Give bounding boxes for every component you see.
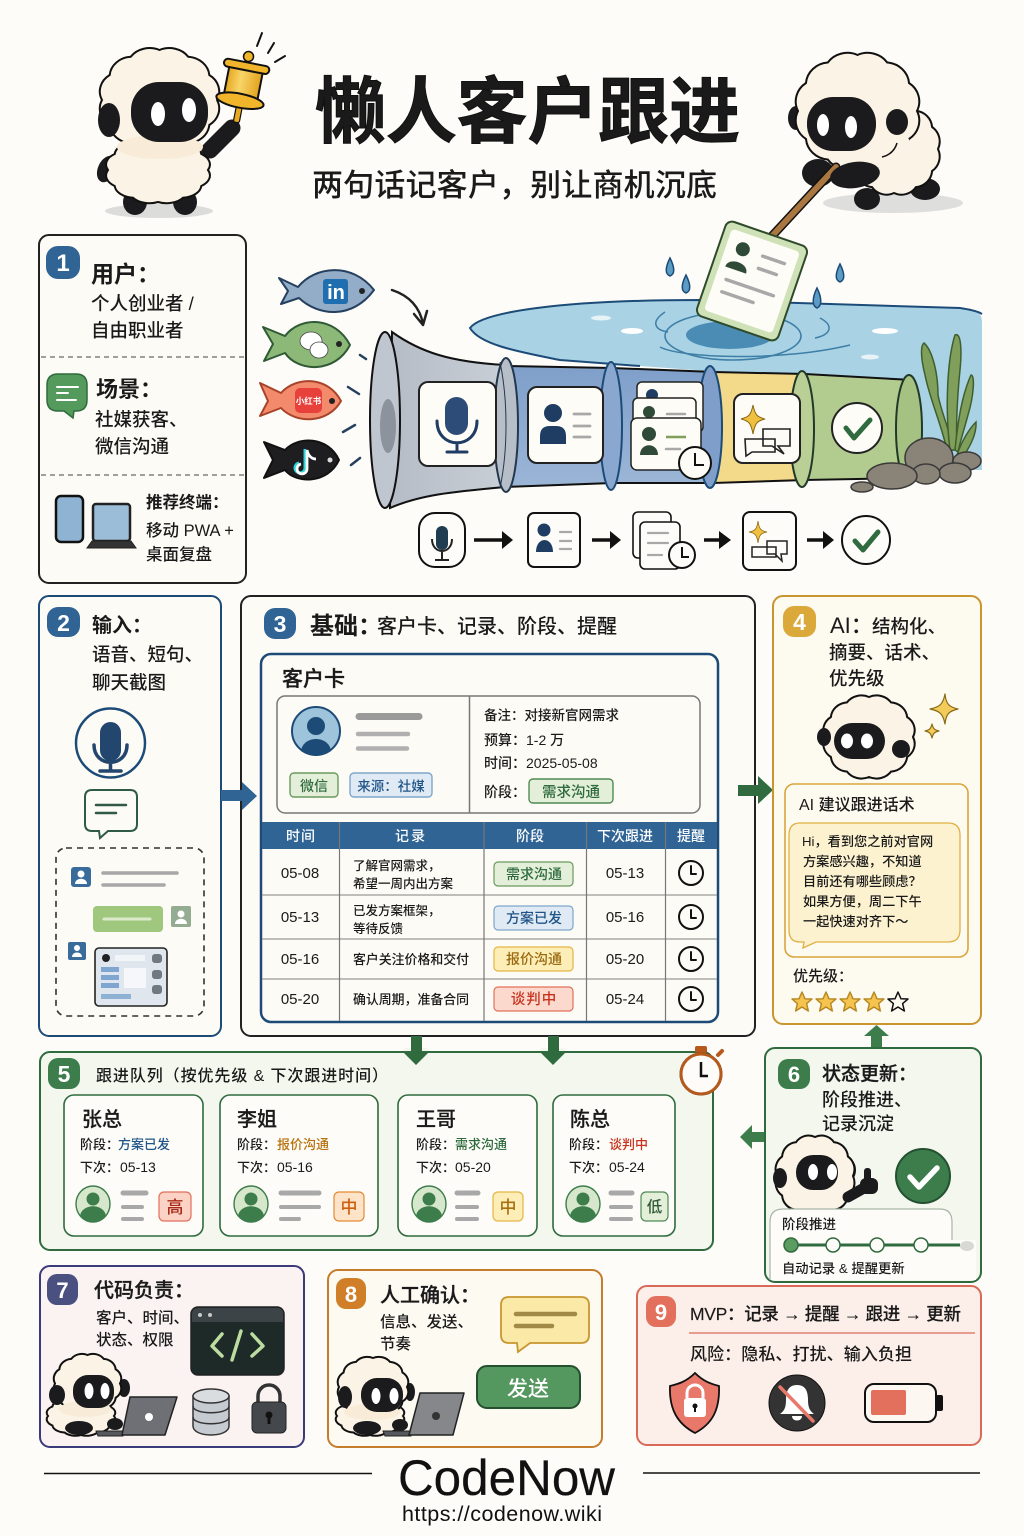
badge 7: [47, 1274, 78, 1305]
badge 8: [336, 1278, 366, 1309]
AI script card: AI 建议跟进话术: [799, 796, 915, 814]
badge 5: [48, 1058, 80, 1089]
footer rules: [44, 1472, 980, 1474]
AI text: 优先级: [829, 668, 885, 689]
icon: database: [193, 1389, 229, 1435]
panel 2: input: [39, 596, 221, 1036]
queue card: 张总: [64, 1095, 203, 1236]
queue card: 王哥: 阶段：: [416, 1137, 455, 1152]
device text: 桌面复盘: [146, 545, 212, 564]
row 05-16: [281, 947, 703, 971]
badge 8: 8: [345, 1282, 357, 1307]
row 05-13: 已发方案框架，: [353, 903, 441, 918]
queue card: 陈总: 陈总: [570, 1108, 610, 1131]
confirm text: 人工确认：: [380, 1284, 480, 1307]
customer card and table: [261, 654, 718, 1022]
icon: mic: [419, 513, 465, 567]
megaphone horn: [370, 332, 518, 508]
icon: lock: [252, 1385, 286, 1433]
fish: wechat: [263, 322, 350, 367]
badge 1: 1: [56, 250, 70, 277]
icon: phone and laptop: [56, 496, 136, 548]
subtitle: 两句话记客户，别让商机沉底: [312, 168, 717, 203]
row 05-20: 确认周期，准备合同: [353, 992, 469, 1007]
badge 9: 9: [655, 1300, 667, 1325]
icon: AI chat: [743, 512, 796, 570]
code text: 代码负责：: [94, 1279, 194, 1302]
row 05-16: 05-20: [606, 951, 644, 968]
arrow: input to foundation: [221, 782, 257, 810]
row 05-13: 05-13: [281, 909, 319, 926]
icon: text bubble: [85, 790, 137, 838]
row 05-08: 05-08: [281, 865, 319, 882]
arrows: foundation to queue: [402, 1036, 567, 1065]
confirm text: 信息、发送、: [380, 1312, 473, 1331]
queue card: 张总: 方案已发: [118, 1137, 170, 1152]
footer logo: CodeNow: [398, 1450, 616, 1506]
icon: green chat bubble: [47, 374, 87, 418]
badge 4: 4: [793, 609, 806, 635]
profile box: 时间：2025-05-08: [484, 755, 598, 771]
mascot: thumbs up sheep: [773, 1136, 878, 1216]
queue card: 王哥: 中: [500, 1198, 516, 1217]
icon: water drops: [666, 258, 844, 308]
arrow: [474, 538, 502, 542]
mascot: sheep with pole: [772, 53, 963, 236]
device text: [146, 493, 234, 564]
profile box: [277, 696, 700, 813]
icon: check: [842, 516, 890, 564]
send button: 发送: [507, 1378, 549, 1401]
profile box: 阶段：: [484, 784, 526, 800]
motion dashes: [343, 355, 366, 465]
customer card heading: 客户卡: [282, 668, 345, 691]
panel 3: foundation: [241, 596, 755, 1036]
panel 7: code: [40, 1266, 304, 1447]
queue card: 陈总: 05-24: [609, 1159, 645, 1175]
code text: 客户、时间、: [96, 1308, 189, 1327]
arrow: fish into funnel: [392, 290, 427, 325]
badge 3: [264, 608, 296, 639]
scenario text: 场景：: [96, 377, 162, 402]
AI script card: Hi，看到您之前对官网: [802, 833, 933, 849]
seaweed: [922, 335, 976, 458]
icon: battery: [865, 1384, 943, 1422]
status text: [822, 1063, 917, 1134]
row 05-13: 05-16: [606, 909, 644, 926]
title: 懒人客户跟进: [315, 73, 740, 153]
send button: [477, 1366, 580, 1408]
queue card: 李姐: 中: [340, 1198, 358, 1217]
icon: privacy shield: [670, 1373, 719, 1433]
arrow: foundation to AI: [738, 776, 773, 804]
user text: 自由职业者: [91, 320, 184, 341]
mascot: sheep ringing bell: [93, 33, 285, 218]
icon: muted bell: [769, 1375, 825, 1431]
row 05-13: 等待反馈: [353, 921, 404, 936]
row 05-08: 了解官网需求，: [353, 858, 441, 873]
row 05-20: 05-24: [606, 991, 644, 1008]
queue card: 陈总: 低: [647, 1198, 663, 1216]
confirm text: 节奏: [380, 1335, 412, 1353]
user text: 用户：: [91, 261, 160, 287]
badge 3: 3: [274, 611, 286, 637]
stage tracker: 阶段推进: [782, 1217, 836, 1232]
fish: xiaohongshu: [260, 381, 341, 419]
pipe: green segment: [805, 374, 922, 483]
AI script card: 一起快速对齐下～: [803, 914, 908, 929]
pipe: blue segment 1: [505, 362, 622, 490]
profile box: 预算：1-2 万: [484, 732, 564, 748]
row 05-08: [281, 858, 703, 891]
row 05-13: 方案已发: [506, 910, 562, 926]
AI script card: [785, 784, 968, 957]
row 05-13: [281, 903, 703, 936]
table: 阶段: [516, 828, 544, 844]
badge 5: 5: [58, 1061, 71, 1087]
queue card: 李姐: [220, 1095, 378, 1236]
scenario text: 微信沟通: [95, 436, 169, 457]
icon: mic circle: [76, 708, 145, 778]
AI text: 摘要、话术、: [829, 642, 940, 663]
AI text: [829, 613, 946, 689]
row 05-20: 05-20: [281, 991, 319, 1008]
pipe: blue segment 2: [612, 366, 722, 488]
row 05-08: 希望一周内出方案: [353, 876, 454, 891]
queue card: 张总: 05-13: [120, 1159, 156, 1175]
confirm text: [380, 1284, 480, 1353]
badge 9: [646, 1296, 676, 1327]
queue card: 王哥: 05-20: [455, 1159, 491, 1175]
code text: [94, 1279, 194, 1349]
foundation heading: 客户卡、记录、阶段、提醒: [377, 615, 617, 638]
input text: 语音、短句、: [92, 644, 203, 665]
queue card: 张总: 下次：: [80, 1160, 119, 1175]
arrow: status to AI: [864, 1025, 889, 1048]
table: 记录: [395, 828, 427, 844]
foundation heading: 基础：: [310, 613, 382, 640]
customer card lifted from pond: [695, 220, 809, 342]
profile box: 来源：社媒: [357, 779, 425, 794]
fish: linkedin: [279, 270, 374, 312]
illustration: funnel pipeline: [260, 53, 982, 508]
profile box: 备注：对接新官网需求: [484, 707, 619, 723]
panel 4: AI: [773, 596, 981, 1024]
rocks: [851, 438, 981, 492]
queue card: 张总: 高: [166, 1198, 184, 1217]
row 05-16: 客户关注价格和交付: [353, 952, 469, 967]
icon: docs and clock: [633, 512, 695, 569]
panel 5: follow-up queue: [40, 1046, 722, 1250]
row 05-16: 报价沟通: [506, 951, 562, 967]
row 05-08: 需求沟通: [506, 866, 562, 882]
mascot: sheep at laptop: [47, 1354, 177, 1436]
code text: 状态、权限: [96, 1331, 174, 1349]
queue card: 李姐: 阶段：: [237, 1137, 276, 1152]
panel 9: MVP and risks: [637, 1286, 981, 1445]
fish: xiaohongshu: 小红书: [296, 396, 322, 406]
priority stars: 优先级：: [793, 968, 853, 985]
queue card: 陈总: 谈判中: [609, 1137, 648, 1152]
panel 6: status update: [765, 1048, 981, 1282]
queue heading: 跟进队列（按优先级 & 下次跟进时间）: [96, 1066, 388, 1085]
table: 时间: [286, 828, 316, 844]
risk text: 风险：隐私、打扰、输入负担: [690, 1345, 912, 1364]
badge 1: [46, 246, 80, 279]
badge 4: [783, 606, 816, 637]
stage tracker: [770, 1209, 976, 1280]
badge 2: [47, 607, 80, 637]
queue card: 王哥: 需求沟通: [455, 1137, 507, 1152]
table: [262, 822, 717, 1021]
fish: linkedin: in: [327, 282, 345, 304]
foundation heading: [310, 613, 617, 640]
icon: message bubble: [501, 1297, 589, 1352]
icon: stopwatch: [680, 1046, 722, 1095]
queue card: 陈总: 下次：: [569, 1160, 608, 1175]
queue card: 王哥: 下次：: [416, 1160, 455, 1175]
screenshot dashed box: [56, 848, 204, 1016]
MVP text: MVP：记录 → 提醒 → 跟进 → 更新: [690, 1304, 961, 1324]
pipe: yellow segment: [714, 371, 814, 487]
input text: [92, 614, 203, 693]
mascot: sheep at laptop: [336, 1357, 464, 1436]
status text: 状态更新：: [822, 1063, 917, 1085]
user text: 个人创业者 /: [91, 293, 195, 314]
arrow: [704, 538, 720, 542]
queue card: 陈总: [553, 1095, 675, 1236]
status text: 阶段推进、: [822, 1090, 912, 1110]
icon: check badge: [896, 1149, 950, 1203]
AI text: 结构化、: [872, 616, 946, 637]
profile box: 微信: [300, 778, 328, 794]
device text: 移动 PWA +: [146, 521, 234, 540]
queue card: 李姐: 报价沟通: [277, 1137, 329, 1152]
scenario text: 社媒获客、: [95, 409, 188, 430]
AI script card: 如果方便，周二下午: [803, 893, 922, 909]
panel 1: user: [39, 235, 246, 583]
icon: sparkles: [925, 694, 958, 738]
badge 6: 6: [788, 1062, 800, 1087]
icon: code window: [191, 1307, 284, 1375]
user text: [91, 261, 195, 341]
row 05-20: [281, 987, 703, 1011]
queue card: 王哥: 王哥: [416, 1109, 456, 1131]
queue card: 张总: 张总: [82, 1108, 122, 1131]
queue card: 张总: 阶段：: [80, 1137, 119, 1152]
row 05-16: 05-16: [281, 951, 319, 968]
queue card: 李姐: 李姐: [237, 1108, 277, 1131]
fish: tiktok: [264, 441, 339, 479]
priority stars: [792, 968, 908, 1011]
device text: 推荐终端：: [146, 493, 228, 512]
badge 6: [778, 1059, 810, 1089]
panel 8: human confirm: [328, 1270, 602, 1447]
AI script card: 目前还有哪些顾虑？: [803, 873, 922, 889]
badge 2: 2: [57, 610, 70, 636]
queue card: 李姐: 下次：: [237, 1160, 276, 1175]
status text: 记录沉淀: [822, 1114, 894, 1134]
queue card: 王哥: [398, 1095, 537, 1236]
process icon row: [419, 512, 890, 570]
badge 7: 7: [56, 1278, 69, 1303]
footer url: https://codenow.wiki: [402, 1502, 602, 1526]
queue card: 陈总: 阶段：: [569, 1137, 608, 1152]
stage tracker: 自动记录 & 提醒更新: [782, 1261, 905, 1276]
input text: 聊天截图: [92, 672, 166, 693]
pond: [470, 300, 982, 470]
arrow: [592, 538, 611, 542]
arrow: status to queue: [740, 1125, 765, 1149]
table: 下次跟进: [597, 828, 653, 844]
row 05-20: 谈判中: [511, 991, 557, 1008]
AI script card: 方案感兴趣，不知道: [803, 853, 922, 869]
row 05-08: 05-13: [606, 865, 644, 882]
input text: 输入：: [92, 614, 152, 637]
AI text: AI：: [830, 613, 873, 638]
queue card: 李姐: 05-16: [277, 1159, 313, 1175]
scenario text: [95, 377, 188, 457]
table: 提醒: [677, 828, 705, 844]
arrow: [807, 538, 824, 542]
profile box: 需求沟通: [542, 784, 600, 801]
icon: contact card: [528, 513, 580, 567]
mascot: sheep head: [817, 695, 915, 779]
